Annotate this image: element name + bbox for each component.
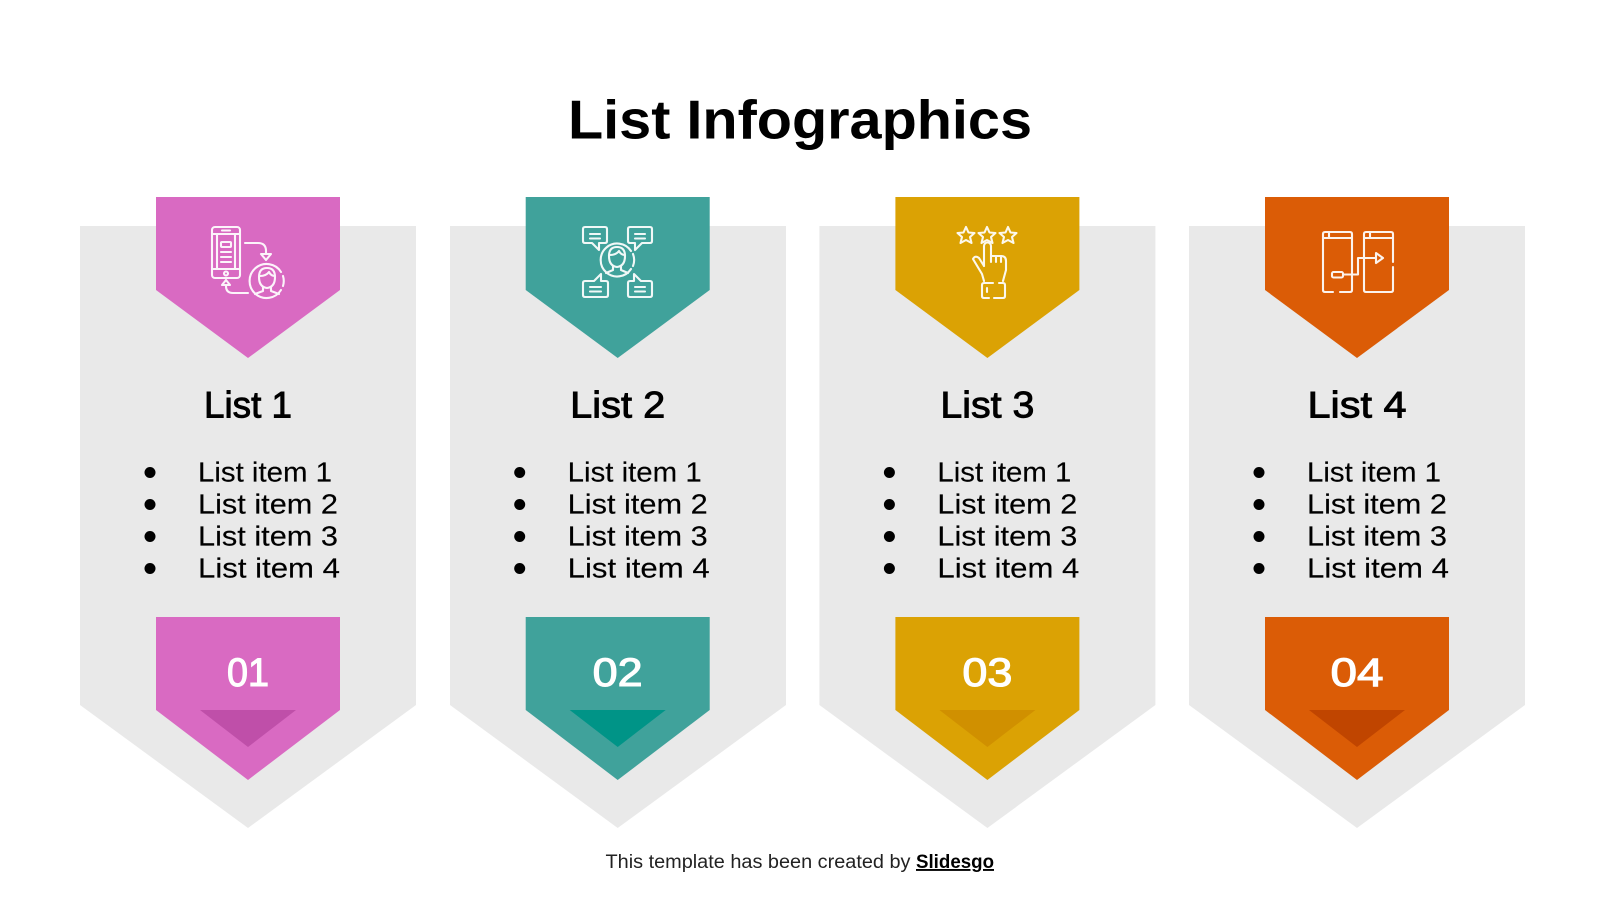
top pentagon	[1265, 197, 1449, 358]
bullet list: List item 4	[198, 552, 340, 584]
footer credit: Slidesgo	[916, 852, 994, 873]
inner triangle	[939, 710, 1035, 747]
heading: List 4	[1308, 384, 1406, 426]
bottom pentagon	[895, 617, 1079, 780]
panel: list 2	[450, 197, 786, 828]
heading: List 2	[570, 384, 665, 426]
bullet list: List item 4	[568, 552, 710, 584]
bullet list: List item 2	[198, 488, 338, 520]
inner triangle	[1309, 710, 1405, 747]
number: 03	[962, 651, 1012, 695]
bullet list	[1254, 456, 1449, 584]
inner triangle	[200, 710, 296, 747]
panel background	[1189, 226, 1525, 828]
top pentagon	[156, 197, 340, 358]
bullet list: List item 3	[568, 520, 708, 552]
panel: list 4	[1189, 197, 1525, 828]
panel: list 1	[80, 197, 416, 828]
bottom pentagon	[526, 617, 710, 780]
heading: List 1	[204, 384, 292, 426]
bullet list: List item 1	[198, 456, 332, 488]
panel background	[80, 226, 416, 828]
heading: List 3	[940, 384, 1034, 426]
bullet list: List item 3	[1307, 520, 1447, 552]
bullet list	[144, 456, 340, 584]
bullet list: List item 3	[198, 520, 338, 552]
number: 04	[1330, 651, 1384, 695]
panel background	[819, 226, 1155, 828]
panel background	[450, 226, 786, 828]
top pentagon	[526, 197, 710, 358]
bullet list: List item 2	[1307, 488, 1447, 520]
bullet list: List item 1	[1307, 456, 1441, 488]
bullet list: List item 2	[937, 488, 1077, 520]
inner triangle	[570, 710, 666, 747]
bullet list: List item 3	[937, 520, 1077, 552]
number: 01	[227, 651, 269, 695]
bullet list: List item 2	[568, 488, 708, 520]
icon: two screens with connection	[1323, 232, 1393, 292]
number: 02	[593, 651, 643, 695]
bullet list	[514, 456, 710, 584]
title: List Infographics	[568, 88, 1032, 150]
bullet list: List item 1	[937, 456, 1071, 488]
bottom pentagon	[156, 617, 340, 780]
bullet list	[884, 456, 1079, 584]
footer credit: This template has been created by	[606, 852, 911, 873]
icon: user with speech bubbles	[583, 227, 652, 297]
bottom pentagon	[1265, 617, 1449, 780]
top pentagon	[895, 197, 1079, 358]
icon: hand rating stars	[958, 227, 1016, 298]
panel: list 3	[819, 197, 1155, 828]
bullet list: List item 4	[937, 552, 1079, 584]
bullet list: List item 1	[568, 456, 702, 488]
icon: phone and user	[212, 227, 284, 298]
bullet list: List item 4	[1307, 552, 1449, 584]
